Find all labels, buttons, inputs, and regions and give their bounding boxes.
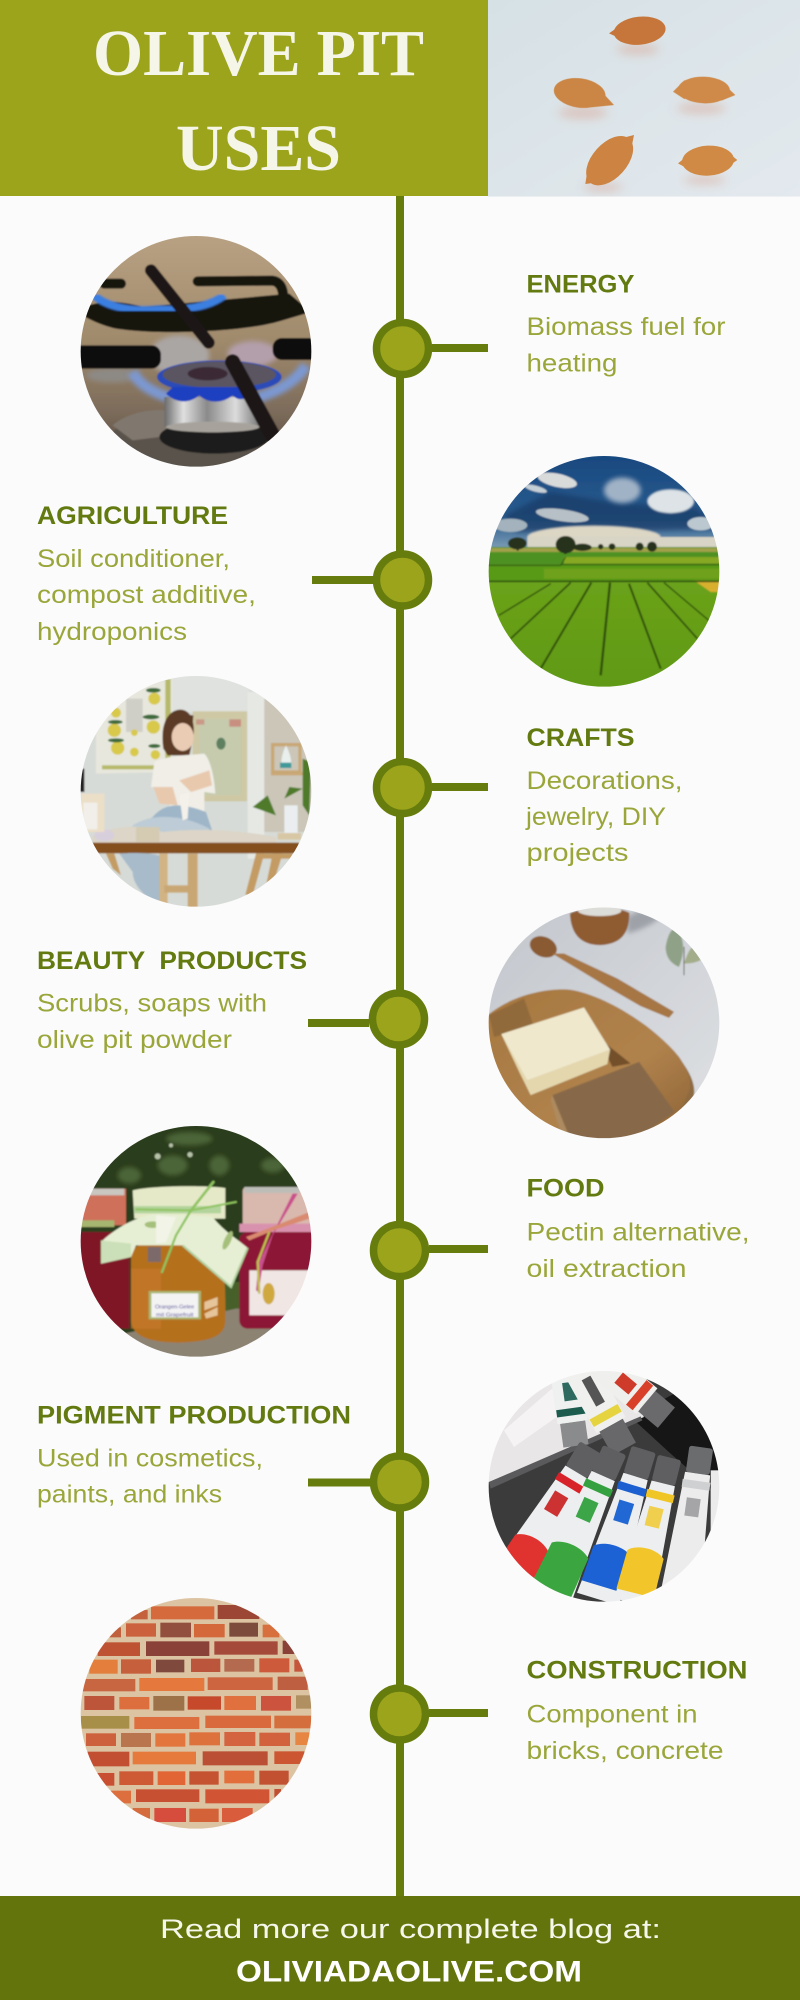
text: construction — [526, 1656, 748, 1765]
item: food — [76, 1122, 750, 1362]
cloth — [133, 1186, 225, 1219]
photo: jam jars: mit Grapefruit — [156, 1312, 194, 1318]
footer website: OLIVIADAOLIVE.COM — [236, 1956, 582, 1988]
node marker — [308, 1456, 426, 1508]
text: energy — [526, 270, 726, 378]
table items — [93, 827, 276, 844]
header photo: olive pits — [488, 0, 800, 197]
item: energy — [73, 232, 726, 472]
shelf and plant — [271, 745, 303, 774]
left jar — [76, 1232, 129, 1329]
text: pigment production: Used in cosmetics, — [37, 1444, 263, 1472]
node marker — [374, 1688, 488, 1740]
text: energy: heating — [526, 350, 618, 378]
photo: woman crafting — [76, 672, 318, 912]
right jar — [239, 1232, 319, 1329]
blue tube — [577, 1446, 656, 1602]
text: energy: Biomass fuel for — [526, 313, 726, 341]
node marker — [308, 993, 424, 1045]
upper tubes — [552, 1378, 588, 1448]
photo: gas burner — [80, 236, 312, 467]
text: crafts: projects — [526, 839, 628, 867]
header — [0, 0, 800, 197]
photo: green field — [484, 452, 724, 694]
footer call to action: Read more our complete blog at: — [160, 1914, 661, 1944]
photo: soap on wooden board — [484, 904, 724, 1147]
item: construction — [76, 1594, 748, 1834]
text: beauty products — [37, 947, 307, 1054]
photo: paint tubes — [488, 1371, 720, 1602]
title — [93, 17, 424, 185]
title: OLIVE PIT — [93, 17, 424, 90]
item: agriculture — [37, 452, 724, 694]
node marker — [376, 762, 488, 814]
text: beauty products: olive pit powder — [37, 1026, 232, 1054]
photo: brick wall — [76, 1594, 316, 1834]
text: energy: ENERGY — [526, 270, 635, 298]
leaves — [666, 928, 683, 967]
photo: jam jars — [76, 1122, 319, 1362]
footer banner — [0, 1896, 800, 2000]
text: pigment production: paints, and inks — [37, 1480, 222, 1508]
spoon — [529, 935, 558, 958]
timeline vertical line — [396, 196, 404, 1896]
green tube — [534, 1446, 626, 1598]
text: beauty products: BEAUTY PRODUCTS — [37, 947, 307, 975]
item: pigment production — [38, 1371, 720, 1602]
text: pigment production: PIGMENT PRODUCTION — [37, 1402, 351, 1430]
lemon poster — [96, 679, 173, 774]
header title panel — [0, 0, 488, 196]
text: crafts: jewelry, DIY — [525, 803, 666, 831]
photo: jam jars: Orangen-Gelee — [155, 1305, 194, 1311]
map poster — [193, 711, 247, 801]
text: agriculture: hydroponics — [37, 618, 187, 646]
text: food: oil extraction — [526, 1255, 686, 1283]
text: crafts — [525, 724, 682, 867]
red tube — [506, 1442, 600, 1578]
yellow tube — [616, 1455, 681, 1600]
middle jar — [131, 1242, 225, 1343]
text: agriculture: compost additive, — [37, 581, 256, 609]
soap bars — [552, 1062, 674, 1138]
node marker — [312, 554, 428, 606]
text: agriculture — [37, 502, 256, 646]
item: crafts — [76, 672, 682, 912]
text: food: Pectin alternative, — [526, 1218, 750, 1246]
text: food: FOOD — [526, 1174, 604, 1202]
text: agriculture: AGRICULTURE — [37, 502, 228, 530]
text: crafts: CRAFTS — [526, 724, 634, 752]
table — [89, 843, 299, 853]
text: construction: CONSTRUCTION — [526, 1656, 748, 1684]
text: pigment production — [37, 1402, 351, 1508]
gray tube — [662, 1446, 713, 1586]
text: construction: Component in — [526, 1700, 698, 1728]
text: agriculture: Soil conditioner, — [37, 545, 230, 573]
node marker — [374, 1224, 488, 1276]
woman — [162, 710, 194, 755]
bowl — [570, 908, 629, 945]
title: USES — [176, 112, 341, 185]
text: food — [526, 1174, 750, 1283]
item: beauty products — [37, 904, 724, 1147]
node marker — [376, 322, 488, 374]
text: construction: bricks, concrete — [526, 1737, 724, 1765]
text: crafts: Decorations, — [526, 767, 682, 795]
text: beauty products: Scrubs, soaps with — [37, 990, 267, 1018]
